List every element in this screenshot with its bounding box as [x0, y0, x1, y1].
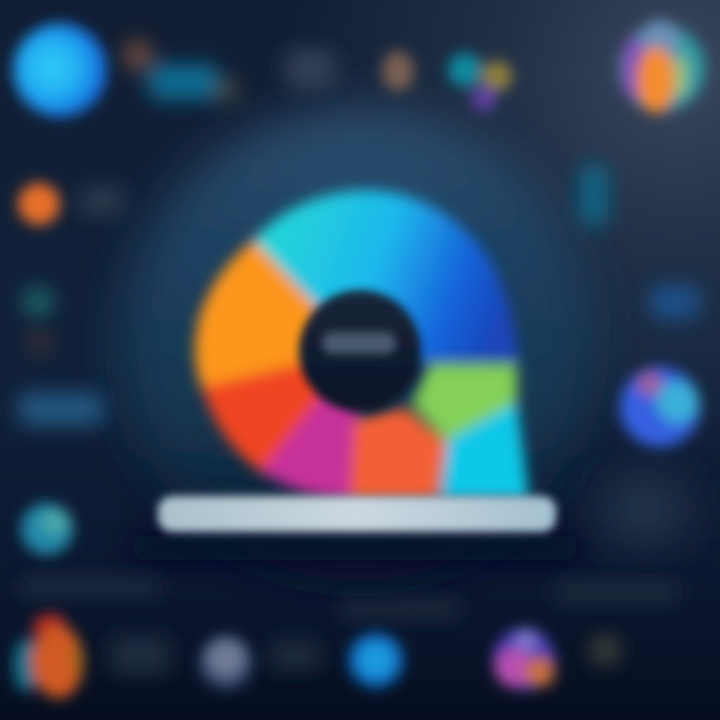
- top left label: [123, 40, 239, 100]
- label: [80, 188, 125, 214]
- icon: bottom left multicolour circle: [13, 613, 84, 698]
- faint labels: [20, 578, 680, 675]
- donut chart: [195, 190, 529, 499]
- teal bar: [580, 165, 608, 225]
- centre label: [322, 332, 396, 354]
- blue label: [650, 285, 700, 319]
- donut centre: [299, 290, 421, 412]
- bottom row icons: [13, 578, 680, 698]
- segment: red: [202, 350, 358, 477]
- icon: purple grey circle: [199, 635, 253, 689]
- icon: tan dot: [382, 51, 414, 91]
- segment: cyan to blue: [253, 190, 519, 362]
- icon: orange dot: [18, 183, 60, 225]
- segment: cyan: [440, 402, 529, 499]
- segment: magenta: [262, 350, 358, 499]
- segment: orange-red: [350, 408, 447, 499]
- segment: green: [412, 364, 517, 442]
- icon: blue pie circle: [620, 367, 700, 447]
- right column elements: [580, 165, 700, 540]
- icon: cyan circle: [21, 503, 73, 555]
- segment: orange: [195, 240, 358, 393]
- icon: teal dot: [23, 287, 53, 317]
- label: [18, 392, 104, 426]
- icon: blue circle: [348, 632, 404, 688]
- dark label: [605, 480, 685, 540]
- base bar: [158, 496, 556, 532]
- shadow under base bar: [130, 535, 580, 561]
- icon: top left blue circle: [13, 23, 107, 117]
- faint label: [285, 50, 335, 88]
- icon: cluster: [448, 53, 512, 111]
- large ring behind donut: [121, 109, 593, 581]
- icon: multicolour circle: [493, 628, 555, 690]
- left column icons: [18, 183, 125, 555]
- icon: top right multicolour circle: [619, 20, 705, 113]
- top centre icons: [285, 50, 512, 111]
- small label: [590, 635, 620, 665]
- small dim dot: [30, 332, 50, 352]
